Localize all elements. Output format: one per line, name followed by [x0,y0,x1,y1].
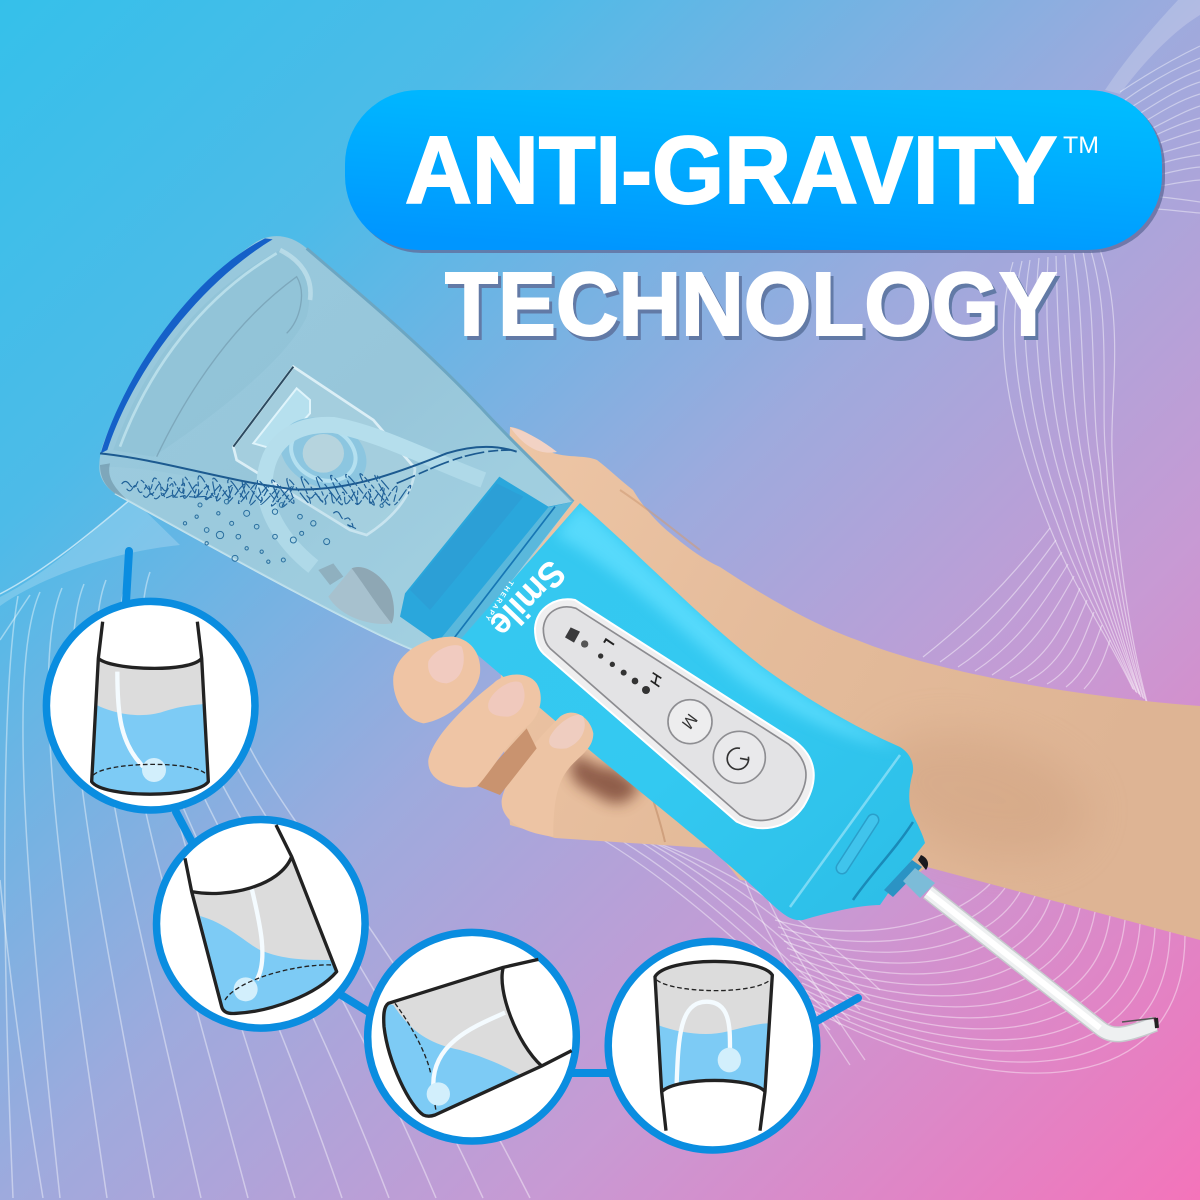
nail 2 [488,682,525,717]
water tint [100,449,573,657]
mode button [668,700,712,744]
title pill: anti-gravity: ANTI-GRAVITY [405,117,1057,224]
background wave lines: upper right [1105,0,1200,213]
fingers over handle [393,637,593,837]
middle finger [428,675,541,787]
end cap fold line [790,755,900,907]
top fingernail [510,427,557,453]
finger junction shade [475,728,537,795]
background wave lines: twisted ribbon [923,250,1147,702]
pressure level label L [604,639,614,645]
heading: technology: TECHNOLOGY [448,259,1060,359]
upper right edge [307,248,573,502]
highlight along upper edge [555,503,900,747]
side slider button [842,820,873,868]
step 1: bottle upright [46,601,255,810]
heading: technology: TECHNOLOGY [445,255,1057,355]
pickup tube [265,425,483,567]
background wave lines: lower left [0,498,530,1198]
blue rim [101,238,273,453]
nail 1 [428,645,464,683]
background wave lines: lower right [600,832,1185,1073]
bubbles [183,499,383,563]
mode button: M [678,710,701,733]
level dots [598,653,650,694]
foam [122,474,411,529]
water surface line [100,447,517,490]
pressure level label H [651,673,661,687]
bottom rim tint [100,463,127,499]
battery icon [565,627,580,643]
lower edge [115,493,413,650]
brand logo: Smile [482,552,574,646]
nozzle [884,855,1157,1034]
pickup weight [318,563,343,585]
blue collar [400,477,573,650]
upper finger [393,637,480,723]
filter coil [268,404,378,503]
step 3: bottle nearly horizontal [368,932,576,1141]
control panel [535,599,814,828]
bottle reservoir [99,236,573,657]
hand and forearm, behind product [500,427,1200,940]
nail 3 [549,715,585,749]
power button [713,731,765,783]
lower finger [502,713,593,837]
step 2: bottle tilted slightly [156,820,365,1028]
wrist shading [858,709,1102,881]
handle body [460,503,925,920]
inner wall shading [113,250,309,457]
title pill: anti-gravity: TM [1063,132,1099,159]
title pill: anti-gravity [345,90,1165,253]
connector lines [126,551,858,1073]
brand logo: THERAPY [483,579,514,622]
step 4: bottle inverted [608,941,817,1150]
pump housing panel [233,367,415,535]
palm shadow [570,755,640,803]
